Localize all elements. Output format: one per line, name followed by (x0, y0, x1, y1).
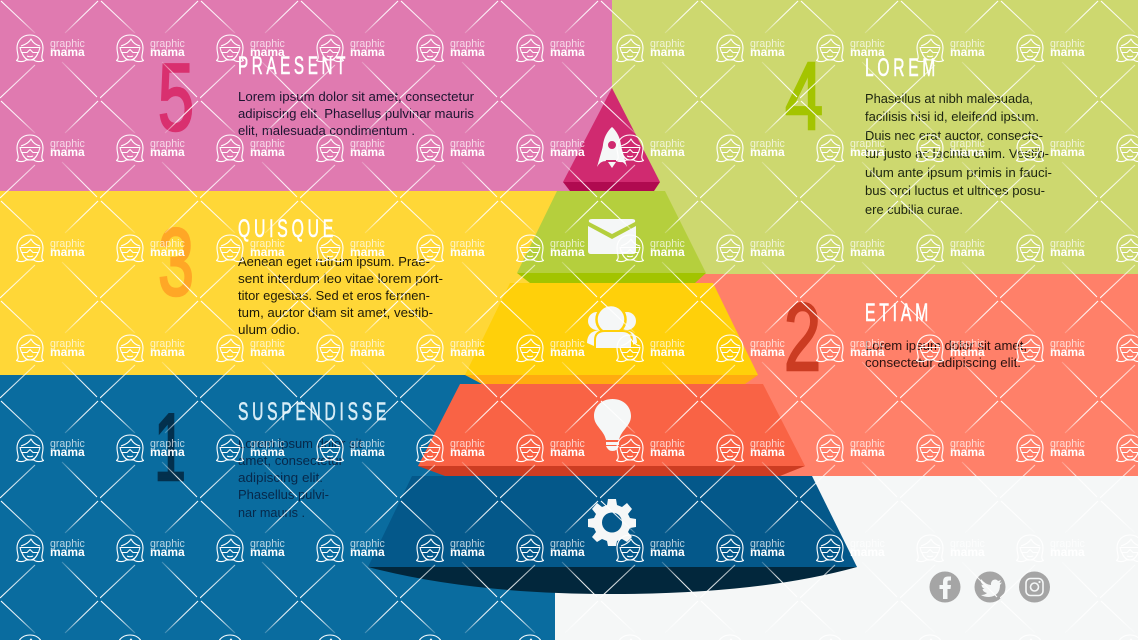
block 2 (784, 284, 1027, 391)
icon: instagram (1019, 572, 1050, 602)
watermark text: mama (750, 245, 785, 259)
watermark text: mama (250, 345, 285, 359)
watermark text: mama (50, 245, 85, 259)
watermark text: graphic (450, 38, 485, 50)
text block 1: amet, consectetur (238, 453, 344, 468)
watermark text: graphic (350, 338, 385, 350)
text block 2: Lorem ipsum dolor sit amet, (865, 338, 1027, 353)
text block 5 (238, 89, 475, 138)
watermark text: mama (250, 245, 285, 259)
watermark text: mama (50, 345, 85, 359)
watermark text: mama (1050, 345, 1085, 359)
watermark text: mama (650, 545, 685, 559)
watermark text: graphic (850, 38, 885, 50)
text block 3: titor egestas. Sed et eros fermen- (238, 288, 430, 303)
watermark text: graphic (250, 38, 285, 50)
watermark text: graphic (950, 438, 985, 450)
watermark text: graphic (50, 438, 85, 450)
watermark text: mama (850, 345, 885, 359)
text block 3: ulum odio. (238, 322, 300, 337)
watermark text: mama (550, 545, 585, 559)
pyramid level 1 blue (368, 476, 857, 594)
heading ETIAM: ETIAM (865, 299, 932, 327)
watermark text: graphic (350, 138, 385, 150)
watermark text: graphic (150, 238, 185, 250)
panel: 5 pink (0, 0, 612, 191)
watermark text: mama (850, 145, 885, 159)
text block 3: tum, auctor diam sit amet, vestib- (238, 305, 433, 320)
watermark text: graphic (950, 538, 985, 550)
text block 1: adipiscing elit. (238, 470, 323, 485)
watermark text: graphic (750, 38, 785, 50)
watermark text: mama (450, 45, 485, 59)
text block 4: bus orci luctus et ultrices posu- (865, 183, 1045, 198)
watermark text: mama (150, 245, 185, 259)
watermark text: mama (450, 445, 485, 459)
watermark text: graphic (450, 538, 485, 550)
text block 4 (865, 91, 1052, 217)
watermark text: mama (450, 245, 485, 259)
number 4: 4 (785, 43, 823, 150)
text block 4: ere cubilia curae. (865, 202, 963, 217)
text block 1: Phasellus pulvi- (238, 487, 329, 502)
watermark text: graphic (650, 338, 685, 350)
watermark text: graphic (350, 538, 385, 550)
watermark text: mama (650, 345, 685, 359)
social icons (930, 572, 1050, 602)
watermark text: mama (250, 145, 285, 159)
watermark text: graphic (250, 538, 285, 550)
watermark text: graphic (450, 238, 485, 250)
watermark text: graphic (950, 38, 985, 50)
watermark text: graphic (550, 438, 585, 450)
text block 3 (238, 254, 443, 337)
watermark text: mama (750, 45, 785, 59)
watermark text: mama (950, 145, 985, 159)
icon: rocket (597, 127, 627, 168)
text block 5: elit, malesuada condimentum . (238, 123, 415, 138)
text block 1 (238, 436, 362, 520)
watermark text: mama (150, 445, 185, 459)
watermark text (50, 38, 1085, 559)
watermark text: graphic (850, 438, 885, 450)
watermark text: mama (950, 445, 985, 459)
watermark text: graphic (50, 238, 85, 250)
text block 4: tur justo ac lacinia enim. Vestib- (865, 146, 1049, 161)
watermark text: graphic (1050, 138, 1085, 150)
watermark text: mama (550, 445, 585, 459)
icon: lightbulb (594, 399, 631, 451)
watermark text: mama (850, 445, 885, 459)
heading PRAESENT: PRAESENT (238, 52, 349, 80)
watermark text: mama (950, 245, 985, 259)
icon: people (587, 305, 637, 349)
watermark text: mama (850, 45, 885, 59)
text block 4: Phaseilus at nibh malesuada, (865, 91, 1033, 106)
panel: 2 coral (690, 274, 1138, 476)
watermark text: mama (1050, 245, 1085, 259)
watermark text: mama (850, 545, 885, 559)
watermark text: graphic (750, 238, 785, 250)
watermark text: graphic (650, 238, 685, 250)
watermark text: graphic (850, 538, 885, 550)
text block 4: facilisis nisi id, eleifend ipsum. (865, 109, 1039, 124)
watermark text: mama (750, 545, 785, 559)
watermark text: mama (250, 45, 285, 59)
icon: envelope (588, 219, 636, 254)
text block 1: nar mauris . (238, 505, 305, 520)
text block 2 (865, 338, 1027, 370)
watermark text: mama (250, 445, 285, 459)
watermark text: graphic (150, 338, 185, 350)
watermark text: graphic (150, 38, 185, 50)
watermark text: graphic (650, 438, 685, 450)
pyramid level 4 green (517, 191, 706, 283)
watermark text: graphic (350, 438, 385, 450)
watermark text: mama (350, 145, 385, 159)
icon: facebook (930, 572, 960, 602)
watermark text: mama (950, 345, 985, 359)
watermark text: graphic (50, 538, 85, 550)
text block 3: sent interdum leo vitae lorem port- (238, 271, 443, 286)
icon: twitter (974, 572, 1006, 602)
watermark text: graphic (450, 138, 485, 150)
watermark text: graphic (1050, 238, 1085, 250)
watermark text: mama (550, 345, 585, 359)
watermark text: graphic (1050, 438, 1085, 450)
text block 5: adipiscing elit. Phasellus pulvinar mauris (238, 106, 475, 121)
watermark text: mama (350, 45, 385, 59)
number 5: 5 (158, 44, 194, 151)
pyramid level 3 yellow (465, 283, 758, 384)
text block 4: Duis nec erat auctor, consecte- (865, 128, 1043, 143)
watermark text: mama (850, 245, 885, 259)
watermark text: graphic (250, 238, 285, 250)
watermark text: mama (1050, 145, 1085, 159)
text block 4: ulum ante ipsum primis in fauci- (865, 165, 1052, 180)
watermark text: graphic (950, 338, 985, 350)
watermark text: graphic (650, 138, 685, 150)
watermark text: mama (150, 45, 185, 59)
watermark text: mama (750, 145, 785, 159)
panel: 1 blue (0, 375, 555, 640)
watermark text: mama (550, 245, 585, 259)
watermark text: graphic (550, 38, 585, 50)
number 2: 2 (784, 284, 821, 391)
watermark text: mama (550, 45, 585, 59)
text block 5: Lorem ipsum dolor sit amet, consectetur (238, 89, 475, 104)
heading QUISQUE: QUISQUE (238, 215, 337, 243)
watermark text: mama (350, 245, 385, 259)
watermark text: graphic (250, 138, 285, 150)
watermark text: graphic (650, 538, 685, 550)
watermark text: graphic (150, 538, 185, 550)
watermark text: graphic (250, 338, 285, 350)
watermark text: mama (1050, 445, 1085, 459)
watermark text: graphic (550, 138, 585, 150)
watermark text: graphic (950, 138, 985, 150)
watermark text: graphic (850, 238, 885, 250)
watermark text: graphic (50, 138, 85, 150)
watermark text: graphic (1050, 538, 1085, 550)
watermark text: graphic (750, 138, 785, 150)
watermark text: graphic (350, 238, 385, 250)
watermark text: graphic (750, 338, 785, 350)
watermark text: graphic (750, 438, 785, 450)
watermark text: mama (1050, 45, 1085, 59)
watermark text: mama (950, 545, 985, 559)
watermark text: graphic (50, 38, 85, 50)
watermark text: graphic (150, 438, 185, 450)
watermark text: mama (50, 445, 85, 459)
watermark text: graphic (850, 138, 885, 150)
watermark text: graphic (550, 338, 585, 350)
watermark text: mama (150, 145, 185, 159)
number 3: 3 (158, 209, 194, 316)
pyramid level 5 pink (563, 88, 660, 191)
watermark text: mama (750, 445, 785, 459)
panel: 4 green (612, 0, 1138, 274)
watermark text: mama (650, 45, 685, 59)
heading SUSPENDISSE: SUSPENDISSE (238, 398, 390, 426)
watermark text: mama (750, 345, 785, 359)
heading LOREM: LOREM (865, 54, 939, 82)
watermark text: mama (650, 145, 685, 159)
block 4 (785, 43, 1052, 217)
watermark text: mama (950, 45, 985, 59)
watermark text: graphic (550, 238, 585, 250)
watermark text: mama (450, 145, 485, 159)
panel: 3 yellow (0, 191, 560, 375)
text block 2: consectetur adipiscing elit. (865, 355, 1021, 370)
watermark text: mama (150, 345, 185, 359)
pyramid level 2 coral (418, 384, 805, 476)
watermark text: mama (350, 445, 385, 459)
watermark text: graphic (1050, 38, 1085, 50)
watermark text: graphic (50, 338, 85, 350)
watermark text: mama (150, 545, 185, 559)
icon: gear (588, 499, 636, 546)
watermark text: mama (350, 545, 385, 559)
number 1: 1 (154, 394, 186, 501)
watermark text: mama (1050, 545, 1085, 559)
watermark text: graphic (450, 438, 485, 450)
watermark text: mama (550, 145, 585, 159)
block 3 (158, 209, 443, 337)
watermark text: graphic (450, 338, 485, 350)
watermark text: mama (250, 545, 285, 559)
watermark text: mama (450, 345, 485, 359)
watermark text: mama (650, 245, 685, 259)
watermark text: mama (50, 45, 85, 59)
watermark text: mama (650, 445, 685, 459)
watermark text: graphic (1050, 338, 1085, 350)
watermark text: graphic (950, 238, 985, 250)
watermark text: graphic (150, 138, 185, 150)
watermark text: mama (50, 145, 85, 159)
block 1 (154, 394, 390, 520)
text block 1: Lorem ipsum dolor sit (238, 436, 362, 451)
watermark text: graphic (550, 538, 585, 550)
watermark text: graphic (250, 438, 285, 450)
pyramid (368, 88, 857, 594)
watermark text: graphic (650, 38, 685, 50)
block 5 (158, 44, 475, 151)
watermark text: graphic (350, 38, 385, 50)
watermark text: graphic (850, 338, 885, 350)
watermark text: mama (450, 545, 485, 559)
text block 3: Aenean eget rutrum ipsum. Prae- (238, 254, 430, 269)
watermark text: mama (350, 345, 385, 359)
watermark text: mama (50, 545, 85, 559)
watermark text: graphic (750, 538, 785, 550)
